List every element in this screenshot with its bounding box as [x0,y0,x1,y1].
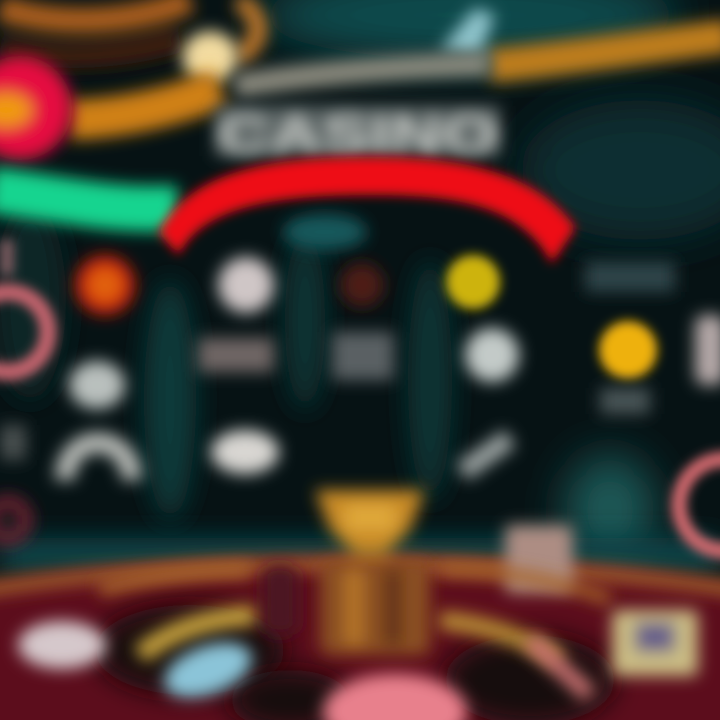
green band [0,190,178,209]
text block: grey label centre [332,332,394,380]
white cards left [18,621,106,669]
left orange band [70,88,220,120]
card right [695,315,720,385]
icon: white spade [69,361,125,409]
pink stripe [530,640,590,695]
blue plate [157,632,259,708]
text block: left small label [0,425,26,460]
red arch banner [162,160,572,258]
text block: far right label top [585,262,675,292]
glow [182,31,238,83]
poker chip lower left [0,502,26,538]
text block: far right label bottom [600,388,650,414]
title: CASINO [218,106,498,164]
icon: white oval [211,430,279,474]
dark red bottle [262,565,298,635]
trophy [315,490,430,655]
pink dome [323,674,467,720]
icon: yellow circle [446,255,500,309]
top right orange band [490,36,720,66]
top left arcs [0,0,258,58]
card top right of trophy [505,525,573,593]
icon: red orange circle [75,255,135,315]
poker chip left [0,240,48,372]
title [215,64,500,164]
icon: dark red circle [340,263,384,307]
icon: red circle [0,56,72,160]
icon: teal light [440,8,495,55]
icon: white arc [65,442,132,480]
text block: grey label [198,338,274,372]
icon: white circle right [465,328,519,382]
card bottom right [612,610,698,676]
poker chip right [679,459,720,551]
icon: white circle [218,257,274,313]
icon: yellow circle far right [599,321,657,379]
roulette table [0,560,720,720]
teal spot under banner [283,214,367,250]
gold table strips [100,570,610,660]
icon: grey slash [462,438,510,472]
